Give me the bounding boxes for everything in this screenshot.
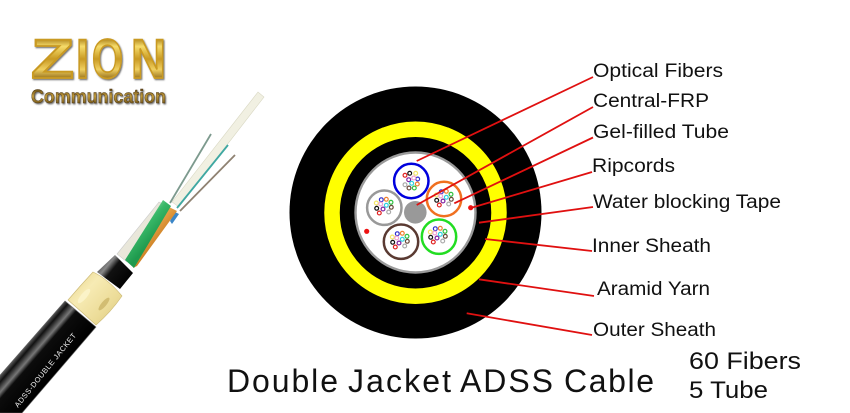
ripcords [364, 205, 473, 234]
outer sheath [290, 86, 542, 338]
label: water blocking tape: Water blocking Tape [593, 192, 781, 213]
title: Jacket [348, 363, 451, 399]
tube count: 5 Tube [689, 377, 768, 404]
specification: fibers and tubes [689, 348, 801, 404]
orange tube [427, 182, 461, 216]
label: inner sheath: Inner Sheath [592, 236, 711, 257]
logo wordmark: I [76, 27, 89, 90]
optical fiber strands [170, 134, 235, 211]
cross-section diagram [290, 86, 542, 338]
leader lines [417, 77, 594, 335]
title: Double [227, 363, 338, 399]
green tube [422, 220, 456, 254]
label: ripcords: Ripcords [592, 156, 675, 177]
logo tagline: Communication [31, 87, 166, 108]
label: gel-filled tube: Gel-filled Tube [593, 122, 729, 143]
label: central FRP: Central-FRP [593, 91, 709, 112]
central strength rod [172, 92, 264, 207]
fiber count: 60 Fibers [689, 348, 801, 375]
outer black jacket [0, 301, 96, 413]
jacket printing: ADSS-DOUBLE JACKET [13, 331, 78, 409]
label: outer sheath: Outer Sheath [593, 320, 716, 341]
label: aramid yarn: Aramid Yarn [597, 279, 710, 300]
blue tube sliver [170, 212, 179, 224]
logo wordmark [31, 27, 166, 90]
central FRP [404, 201, 427, 224]
aramid yarn ring [332, 129, 499, 296]
gray tube [367, 190, 401, 225]
logo wordmark: O [92, 27, 123, 90]
title [227, 363, 654, 399]
orange tube [133, 207, 177, 268]
green tube [125, 200, 171, 268]
aramid yarn [68, 272, 122, 325]
water blocking tape and core [356, 152, 476, 272]
cable photo: cut-away ADSS cable [0, 92, 264, 413]
label: optical fibers: Optical Fibers [593, 61, 723, 82]
title: ADSS [460, 363, 553, 399]
inner black sheath [97, 255, 133, 289]
logo: ZION Communication [31, 27, 166, 108]
brown tube [384, 224, 418, 259]
logo wordmark: Z [31, 27, 74, 90]
white tube [117, 202, 166, 262]
logo wordmark: N [131, 27, 166, 90]
title: Cable [564, 363, 654, 399]
blue tube [394, 164, 428, 198]
component labels [592, 61, 781, 341]
